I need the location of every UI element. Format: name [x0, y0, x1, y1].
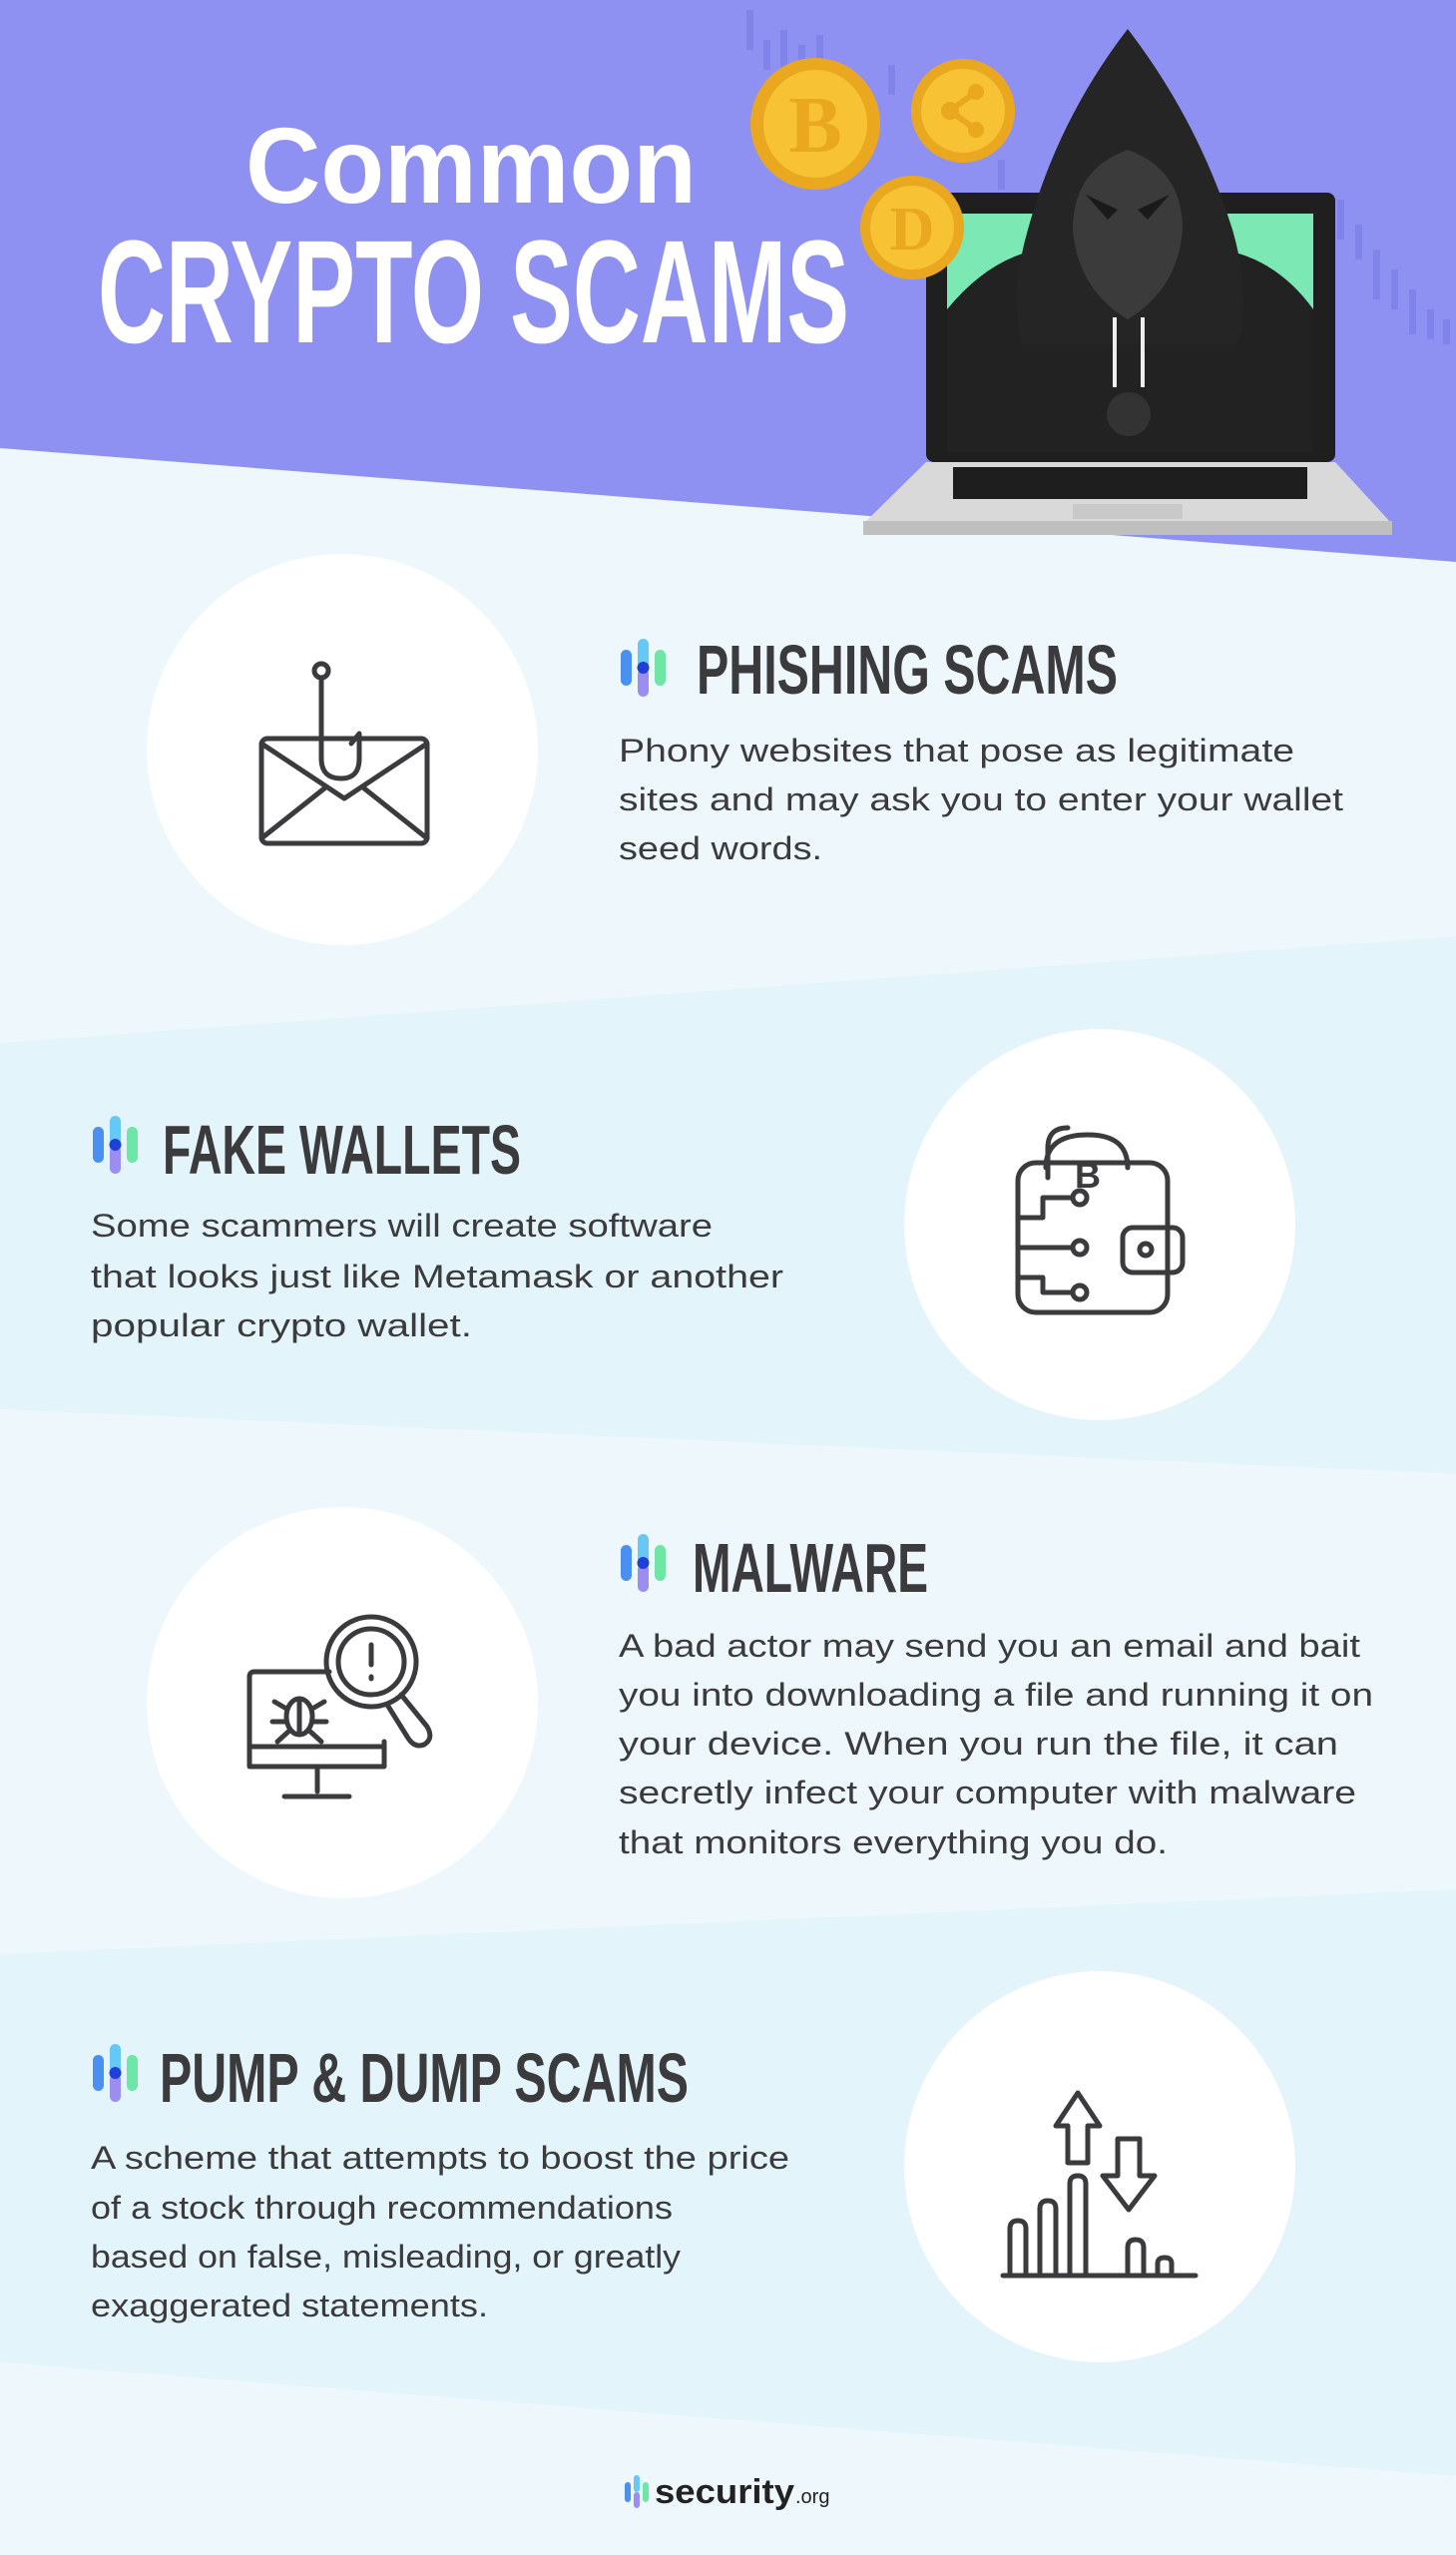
body text: based on false, misleading, or greatly: [91, 2239, 681, 2275]
candlestick chart background: [746, 10, 1450, 344]
body text: you into downloading a file and running it on: [619, 1677, 1373, 1713]
logo bars icon: [93, 1116, 138, 1174]
panel: pump and dump: [91, 1971, 1295, 2362]
logo bars icon: [621, 639, 666, 697]
body text: A bad actor may send you an email and bait: [619, 1628, 1360, 1664]
heading: PUMP & DUMP SCAMS: [160, 2039, 689, 2117]
coin: dogecoin: D: [890, 196, 934, 263]
panel: malware: [147, 1507, 1373, 1898]
footer logo: security: [655, 2473, 794, 2511]
coin: bitcoin: B: [788, 82, 842, 170]
icon circle: chart: [904, 1971, 1295, 2362]
title: Common: [245, 105, 697, 226]
title: [98, 105, 849, 374]
body text: [91, 2140, 789, 2323]
body text: A scheme that attempts to boost the price: [91, 2140, 789, 2176]
body text: Phony websites that pose as legitimate: [619, 733, 1294, 768]
logo bars icon: [93, 2044, 138, 2102]
body text: [619, 733, 1343, 866]
icon circle: wallet: [904, 1029, 1295, 1420]
body text: popular crypto wallet.: [91, 1307, 472, 1343]
panel: fake wallets: [91, 1029, 1295, 1420]
heading: MALWARE: [693, 1529, 928, 1607]
footer logo: .org: [795, 2486, 829, 2508]
body text: your device. When you run the file, it can: [619, 1726, 1338, 1762]
coin: bitcoin: [750, 58, 880, 190]
panel: phishing scams: [147, 554, 1343, 945]
heading: PHISHING SCAMS: [697, 631, 1118, 709]
icon circle: phishing: [147, 554, 538, 945]
header panel: [0, 0, 1456, 562]
footer logo: [625, 2473, 829, 2511]
body text: exaggerated statements.: [91, 2288, 488, 2323]
body text: [91, 1208, 783, 1343]
logo bars icon: [621, 1534, 666, 1592]
body text: that looks just like Metamask or another: [91, 1259, 783, 1294]
illustration: hacker laptop: [863, 29, 1392, 535]
coin: share: [911, 59, 1015, 163]
body text: of a stock through recommendations: [91, 2190, 673, 2226]
body text: seed words.: [619, 830, 822, 866]
body text: that monitors everything you do.: [619, 1824, 1168, 1860]
icon circle: wallet: B: [1075, 1155, 1101, 1196]
body text: [619, 1628, 1373, 1860]
title: CRYPTO SCAMS: [98, 211, 849, 374]
body text: Some scammers will create software: [91, 1208, 713, 1244]
body text: secretly infect your computer with malware: [619, 1775, 1356, 1810]
heading: FAKE WALLETS: [163, 1111, 521, 1189]
icon circle: malware: [147, 1507, 538, 1898]
body text: sites and may ask you to enter your wallet: [619, 781, 1343, 817]
coin: dogecoin: [860, 176, 964, 279]
